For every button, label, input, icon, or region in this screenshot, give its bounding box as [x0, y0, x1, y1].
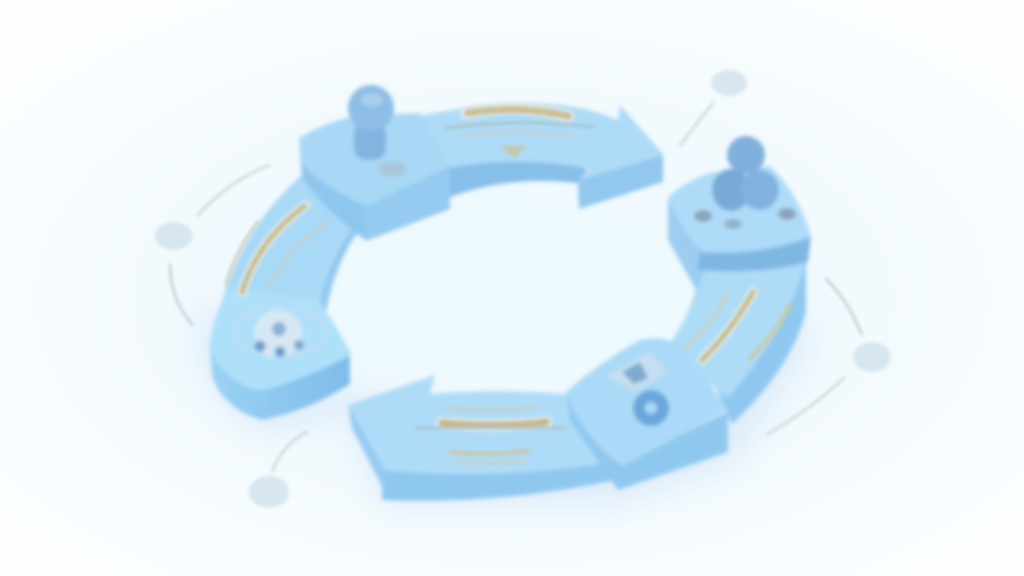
soft ground shadow [195, 300, 815, 505]
segment: bottom-left block [210, 290, 351, 420]
connector: bottom left [249, 431, 308, 508]
segment: top-left block [299, 113, 450, 241]
ring blocks [210, 85, 811, 501]
segment: top arrow [410, 104, 664, 209]
icon: gear with orbit [234, 308, 326, 358]
segment: left band [222, 168, 362, 312]
connector: top right [680, 70, 747, 146]
label: top arrow text [446, 109, 592, 158]
label: right band text [686, 292, 790, 360]
icon: figure group [694, 136, 796, 229]
label: left band text [226, 205, 328, 292]
segment: right band [665, 255, 806, 424]
gold text lines [226, 109, 790, 463]
connectors and nodes [155, 70, 891, 508]
segment: bottom arrow [348, 375, 622, 501]
connector: right [766, 278, 891, 435]
connector: left [155, 165, 270, 325]
segment: bottom-right block [566, 338, 728, 490]
icon: rocket and ring [606, 352, 668, 420]
segment: top-right block [668, 166, 811, 292]
label: bottom arrow text [416, 408, 566, 463]
icon: ball-top pin [348, 85, 406, 177]
